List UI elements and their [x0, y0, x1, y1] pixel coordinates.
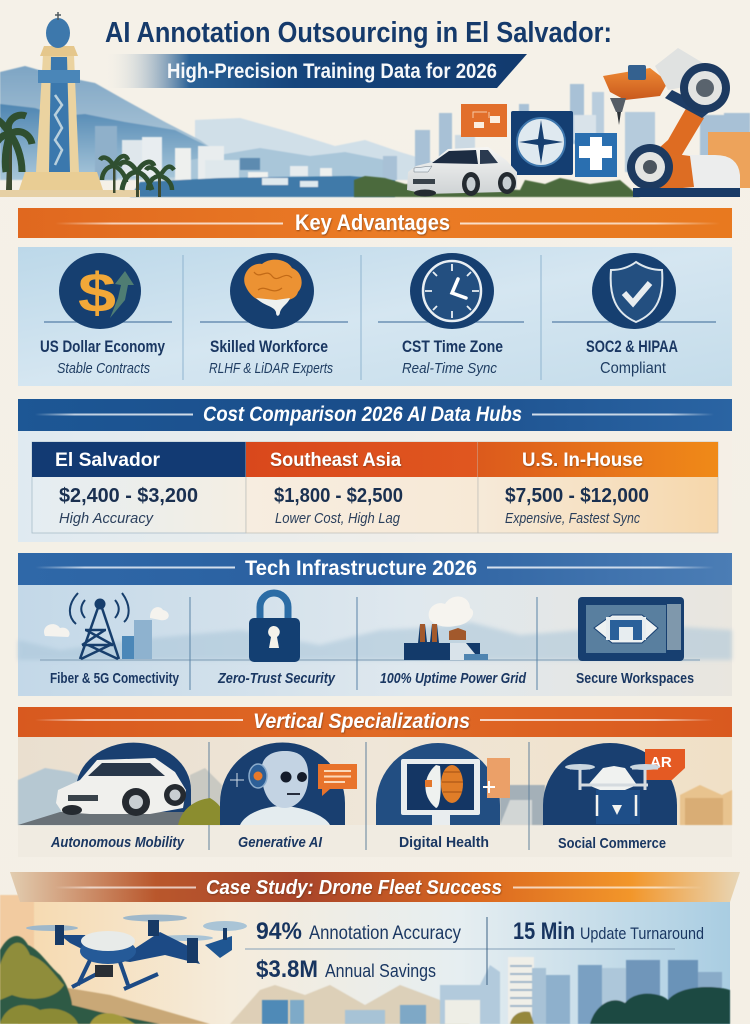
mountains: [0, 66, 440, 182]
label: soc2 and hipaa: SOC2 & HIPAA: [586, 337, 678, 356]
section header: key advantages: [18, 208, 732, 238]
title: AI Annotation Outsourcing in El Salvador:: [105, 17, 612, 49]
city skyline right: [383, 84, 750, 180]
price: southeast asia: $1,800 - $2,500: [274, 485, 403, 507]
panel: case study: [0, 872, 740, 1024]
background trees left: [0, 936, 210, 1024]
background city: [18, 768, 732, 825]
advantage: soc2 and hipaa: [586, 253, 678, 377]
table column: southeast asia: [246, 442, 478, 533]
stat: annotation accuracy: Annotation Accuracy: [309, 923, 461, 944]
icon: padlock: [249, 593, 300, 662]
icon: medical cross tile: [575, 133, 617, 177]
subtitle banner: [105, 54, 527, 88]
icon: drone with ar tag: AR: [650, 754, 672, 771]
icon: secure workspace console: [578, 597, 684, 661]
label: zero-trust security: Zero-Trust Security: [217, 670, 336, 687]
icon: dollar with rising arrow: $: [78, 261, 116, 324]
section header: vertical specializations: [18, 707, 732, 737]
stat: annotation accuracy: 94%: [256, 918, 302, 945]
sublabel: stable contracts: Stable Contracts: [57, 360, 150, 377]
label: generative ai: Generative AI: [238, 834, 323, 851]
icon: brain: [230, 253, 314, 329]
table column: el salvador: El Salvador: [55, 450, 161, 471]
note: lower cost, high lag: Lower Cost, High Lag: [275, 510, 401, 527]
label: secure workspaces: Secure Workspaces: [576, 670, 694, 687]
table column: us in-house: U.S. In-House: [522, 450, 643, 471]
background city right: [262, 957, 730, 1024]
drone: [26, 914, 247, 989]
stat: annual savings: Annual Savings: [325, 961, 436, 981]
sublabel: compliant: Compliant: [600, 360, 667, 377]
price: el salvador: $2,400 - $3,200: [59, 485, 198, 507]
stat: annotation accuracy: [256, 918, 461, 945]
note: high accuracy: High Accuracy: [59, 510, 154, 527]
section header: tech infrastructure: [18, 553, 732, 585]
label: 100 percent uptime power grid: 100% Uptime Power Grid: [380, 670, 527, 687]
label: skilled workforce: Skilled Workforce: [210, 337, 328, 356]
section header: tech infrastructure: Tech Infrastructure 2026: [245, 557, 477, 580]
header scene: landmark, mountains, city and tech icons: [0, 12, 750, 197]
label: cst time zone: CST Time Zone: [402, 337, 503, 356]
price: us in-house: $7,500 - $12,000: [505, 485, 649, 507]
advantage: cst time zone: [402, 253, 503, 377]
note: expensive, fastest sync: Expensive, Fastest Sync: [505, 510, 640, 527]
section header: case study: Case Study: Drone Fleet Success: [206, 877, 502, 899]
ground foliage: [354, 176, 640, 197]
table column: el salvador: [32, 442, 246, 533]
stat: update turnaround: 15 Min: [513, 918, 575, 945]
label: social commerce: Social Commerce: [558, 835, 666, 852]
section header: cost comparison: Cost Comparison 2026 AI Data Hubs: [203, 403, 522, 426]
label: fiber and 5g connectivity: Fiber & 5G Comectivity: [50, 670, 180, 687]
panel: tech infrastructure: [18, 553, 732, 696]
subtitle banner: High-Precision Training Data for 2026: [167, 60, 497, 83]
icon: cell tower: [44, 593, 169, 659]
stat: annual savings: [256, 956, 436, 983]
icon: clock: [410, 253, 494, 329]
icon: digital health monitor: [376, 743, 510, 825]
section header: key advantages: Key Advantages: [295, 210, 450, 235]
table column: southeast asia: Southeast Asia: [270, 450, 401, 471]
orange warehouse: [708, 132, 750, 188]
panel: key advantages: [18, 247, 732, 386]
sublabel: rlhf and lidar experts: RLHF & LiDAR Experts: [209, 360, 333, 377]
icon: orange flow chart tile: [461, 104, 507, 137]
sublabel: real-time sync: Real-Time Sync: [402, 360, 497, 377]
label: autonomous mobility: Autonomous Mobility: [50, 834, 185, 851]
icon: shield check: [592, 253, 676, 329]
table column: us in-house: [478, 442, 718, 533]
advantage: us dollar economy: [40, 253, 165, 377]
section header: vertical specializations: Vertical Specializations: [253, 710, 470, 733]
icon: generative ai robot: [220, 743, 357, 825]
advantage: skilled workforce: [209, 253, 333, 377]
section header: cost comparison: [18, 399, 732, 431]
city skyline left: [95, 126, 395, 197]
background landscape: [18, 622, 732, 660]
landmark tower: [0, 12, 140, 197]
car: [407, 147, 517, 196]
palm trees: [0, 115, 174, 197]
icon: power plant: [404, 596, 488, 660]
panel: cost comparison: [18, 399, 732, 542]
stat: update turnaround: Update Turnaround: [580, 925, 704, 943]
panel: vertical specializations: [18, 707, 732, 857]
stat: annual savings: $3.8M: [256, 956, 318, 983]
background buildings left: [0, 895, 470, 1024]
label: us dollar economy: US Dollar Economy: [40, 337, 165, 356]
label: digital health: Digital Health: [399, 834, 489, 851]
icon: navy compass tile: [511, 111, 573, 175]
icon: suv car: [18, 743, 226, 825]
robot arm: [603, 48, 740, 197]
stat: update turnaround: [513, 918, 704, 945]
icon: drone with ar tag: [543, 743, 685, 825]
section header: case study: [10, 872, 740, 902]
